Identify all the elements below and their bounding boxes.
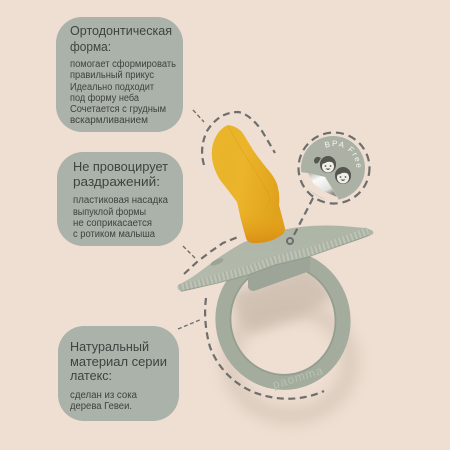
badge dashed ring <box>298 132 370 204</box>
heading: natural material <box>70 340 167 383</box>
dashed callout: shield <box>183 237 238 274</box>
text: orthodontic shape details: правильный прикус <box>70 70 154 81</box>
shield with ribbed rim <box>178 226 373 291</box>
text: orthodontic shape details: под форму неба <box>70 92 139 104</box>
dashed callout: nipple top <box>193 110 275 165</box>
text: no irritation details: выпуклой формы <box>73 206 146 218</box>
text: natural material details <box>70 390 137 412</box>
icon: boy face <box>335 167 351 184</box>
ring brand text: paomma <box>271 363 325 392</box>
latex nipple <box>212 125 285 243</box>
badge label: BPA Free <box>324 140 361 168</box>
text: natural material details: дерева Гевеи. <box>70 401 132 412</box>
panel: orthodontic shape <box>56 17 183 132</box>
air hole <box>210 257 224 267</box>
BPA free badge <box>297 132 371 205</box>
text: no irritation details: не соприкасается <box>73 218 152 229</box>
heading: natural material: латекс: <box>70 369 112 383</box>
heading: natural material: Натуральный <box>70 340 149 354</box>
heading: orthodontic shape <box>70 24 172 54</box>
text: orthodontic shape details: Идеально подходит <box>70 82 154 93</box>
panel: natural material <box>58 326 179 421</box>
text: no irritation details: пластиковая насадка <box>73 195 168 206</box>
heading: no irritation <box>73 160 168 189</box>
text: orthodontic shape details: вскармливанием <box>70 115 148 126</box>
text: orthodontic shape details: Сочетается с грудным <box>70 104 166 115</box>
dashed callout: natural material <box>178 298 324 399</box>
heading: no irritation: раздражений: <box>73 175 160 189</box>
heading: no irritation: Не провоцирует <box>73 160 168 174</box>
text: natural material details: сделан из сока <box>70 390 137 401</box>
heading: orthodontic shape: форма: <box>70 40 111 54</box>
ring handle <box>212 247 354 393</box>
icon: girl face <box>314 156 336 173</box>
heading: natural material: материал серии <box>70 355 167 369</box>
dashed callout: badge to shield <box>287 198 313 244</box>
text: orthodontic shape details: помогает сформировать <box>70 58 176 70</box>
shadows <box>230 264 350 416</box>
text: no irritation details <box>73 195 168 240</box>
peeling sticker corner <box>300 172 339 202</box>
heading: orthodontic shape: Ортодонтическая <box>70 24 172 38</box>
panel: no irritation <box>57 152 183 246</box>
text: no irritation details: с ротиком малыша <box>73 229 155 240</box>
text: orthodontic shape details <box>70 58 176 126</box>
